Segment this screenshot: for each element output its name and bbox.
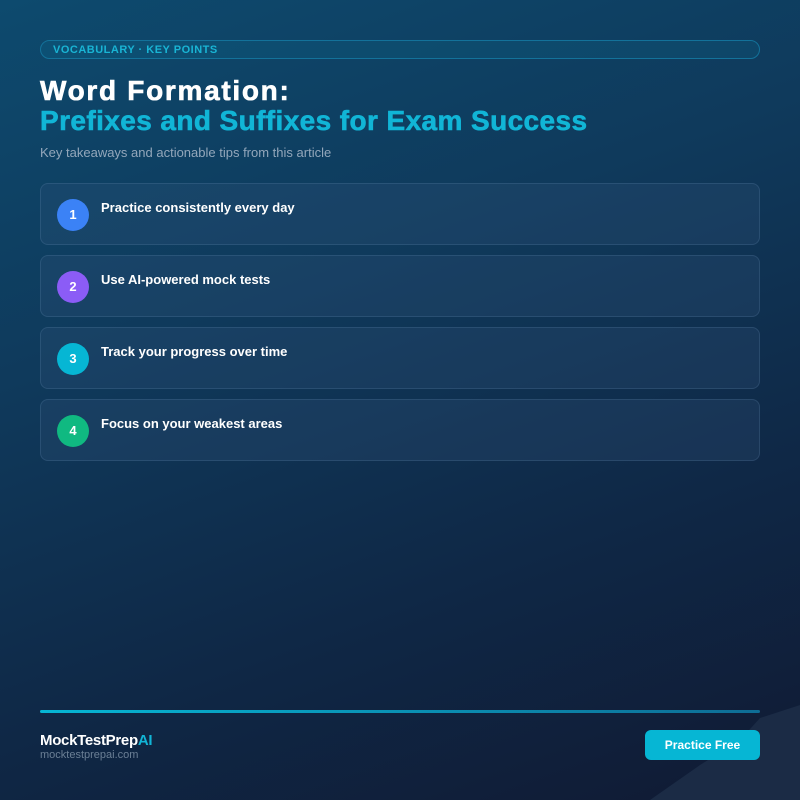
card 3 <box>40 327 760 389</box>
card 4 <box>40 399 760 461</box>
card 4: 4 <box>69 423 77 438</box>
tag pill: VOCABULARY · KEY POINTS <box>53 44 218 56</box>
footer divider <box>40 710 760 713</box>
title: Word Formation: <box>40 75 291 106</box>
subtitle heading: Prefixes and Suffixes for Exam Success <box>40 105 587 136</box>
card 2: Use AI-powered mock tests <box>101 272 270 287</box>
card 3: 3 <box>69 351 77 366</box>
CTA button: Practice Free <box>665 738 740 752</box>
card 2 <box>40 255 760 317</box>
card 1: Practice consistently every day <box>101 200 295 215</box>
card 1: 1 <box>69 207 77 222</box>
card 4: Focus on your weakest areas <box>101 416 282 431</box>
brand: mocktestprepai.com <box>40 749 138 761</box>
brand <box>40 732 152 761</box>
brand: MockTestPrepAI <box>40 732 152 749</box>
card 1 <box>40 183 760 245</box>
card 2: 2 <box>69 279 77 294</box>
tag pill <box>40 40 760 59</box>
CTA button <box>645 730 760 760</box>
description: Key takeaways and actionable tips from this article <box>40 145 331 160</box>
card 3: Track your progress over time <box>101 344 287 359</box>
